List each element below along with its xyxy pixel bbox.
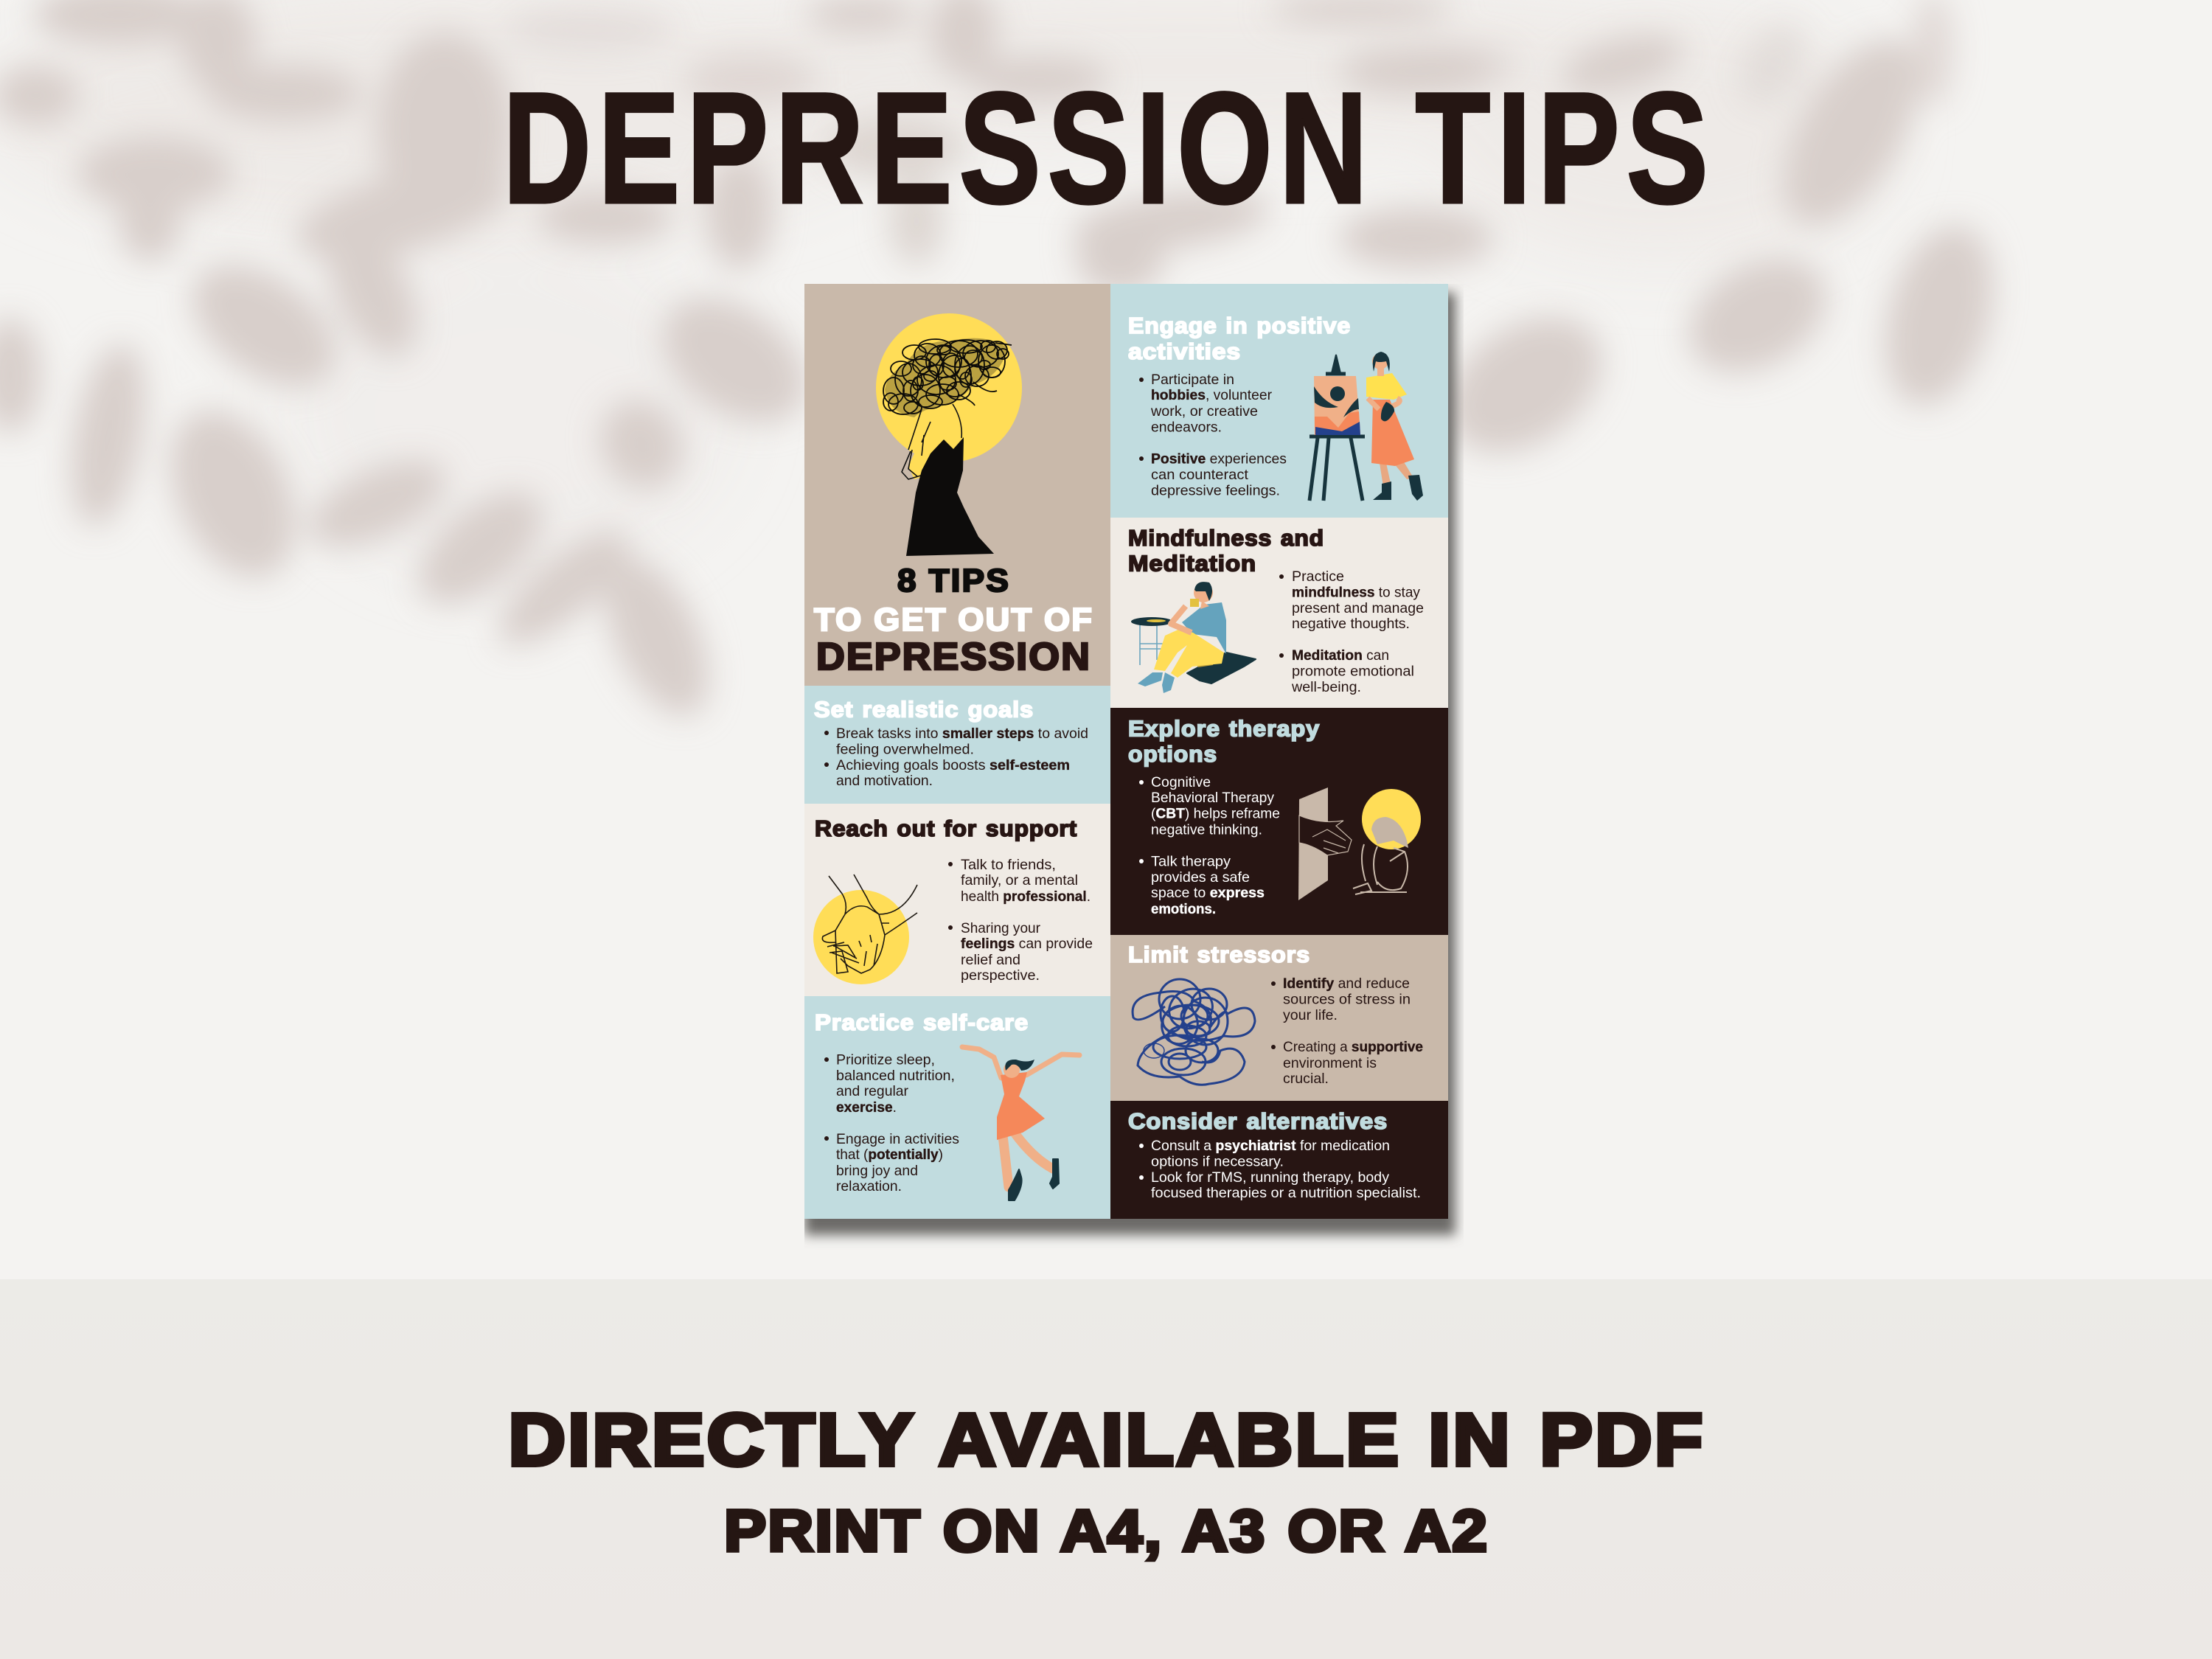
bullet list: negative thinking. <box>1151 821 1262 838</box>
panel: reach out for support <box>804 804 1110 996</box>
bullet list: perspective. <box>961 967 1040 984</box>
blurred leaf shadows <box>0 0 2011 731</box>
bullet list: relaxation. <box>836 1178 902 1194</box>
icon: painter at easel <box>1310 352 1423 501</box>
panel: set realistic goals <box>804 686 1110 804</box>
bullet list <box>1279 568 1424 695</box>
bullet list: (CBT) helps reframe <box>1151 805 1280 821</box>
bullet list <box>824 726 1088 789</box>
bullet list <box>948 857 1093 984</box>
bullet list: sources of stress in <box>1283 991 1411 1007</box>
hero heading: DEPRESSION <box>816 636 1091 678</box>
bullet list: Identify and reduce <box>1283 975 1410 992</box>
bullet list: Participate in <box>1151 372 1234 388</box>
panel: consider alternatives <box>1110 1101 1448 1219</box>
bullet list: endeavors. <box>1151 419 1222 435</box>
bullet list: health professional. <box>961 888 1091 905</box>
bullet list: feeling overwhelmed. <box>836 742 974 758</box>
soft haze behind leaf shadows <box>0 0 1880 575</box>
bullet list <box>1139 774 1280 917</box>
bullet list: Engage in activities <box>836 1131 959 1147</box>
bullet list: Achieving goals boosts self-esteem <box>836 757 1070 773</box>
panel: mindfulness and meditation <box>1110 518 1448 708</box>
bullet list: hobbies, volunteer <box>1151 387 1272 403</box>
footer subheadline: PRINT ON A4, A3 OR A2 <box>724 1498 1489 1563</box>
bullet list: feelings can provide <box>961 936 1093 952</box>
poster drop shadow <box>804 293 1455 1235</box>
hair curls <box>883 339 1012 414</box>
bullet list: Prioritize sleep, <box>836 1051 935 1068</box>
heading: Limit stressors <box>1128 942 1310 967</box>
bullet list: and motivation. <box>836 773 933 789</box>
heading: options <box>1128 741 1217 767</box>
bullet list: Practice <box>1292 568 1344 585</box>
bullet list: Talk therapy <box>1151 854 1231 870</box>
heading <box>1128 715 1320 767</box>
poster <box>804 284 1448 1219</box>
bullet list: environment is <box>1283 1055 1377 1071</box>
bullet list <box>824 1051 959 1194</box>
bullet list: relief and <box>961 952 1020 968</box>
bullet list: bring joy and <box>836 1163 918 1179</box>
heading <box>1128 525 1324 577</box>
bullet list <box>1271 975 1423 1087</box>
bullet list: space to express <box>1151 885 1265 901</box>
bullet list: Consult a psychiatrist for medication <box>1151 1138 1390 1154</box>
heading: Explore therapy <box>1128 715 1320 742</box>
hero heading <box>814 563 1093 678</box>
bullet list: work, or creative <box>1150 403 1258 420</box>
icon: tangled scribble <box>1133 979 1255 1085</box>
footer headline: DIRECTLY AVAILABLE IN PDF <box>509 1399 1705 1481</box>
bullet list: focused therapies or a nutrition specialist. <box>1151 1185 1421 1201</box>
bullet list: crucial. <box>1283 1071 1329 1087</box>
bullet list: mindfulness to stay <box>1292 584 1420 600</box>
bullet list: Positive experiences <box>1151 451 1287 467</box>
bullet list: exercise. <box>836 1099 897 1116</box>
bullet list: Cognitive <box>1151 774 1211 790</box>
bullet list: family, or a mental <box>961 872 1078 888</box>
bullet list: emotions. <box>1151 901 1216 917</box>
bullet list: well-being. <box>1291 679 1361 695</box>
bullet list: Meditation can <box>1292 647 1389 664</box>
main title: DEPRESSION TIPS <box>503 60 1715 236</box>
heading: Practice self-care <box>815 1009 1029 1035</box>
heading: Meditation <box>1128 550 1256 577</box>
bullet list: Creating a supportive <box>1283 1039 1423 1055</box>
bullet list: that (potentially) <box>836 1147 943 1163</box>
bullet list: balanced nutrition, <box>836 1068 955 1084</box>
bullet list: Break tasks into smaller steps to avoid <box>836 726 1088 742</box>
bullet list: depressive feelings. <box>1151 482 1280 498</box>
icon: hand reaching through door to seated person <box>1298 787 1421 900</box>
panel: explore therapy options <box>1110 708 1448 935</box>
icon: woman with curly hair on yellow circle <box>876 313 1022 556</box>
bullet list: present and manage <box>1292 600 1424 616</box>
panel: limit stressors <box>1110 935 1448 1101</box>
bottom band <box>0 1279 2212 1659</box>
heading: Reach out for support <box>815 815 1077 841</box>
heading: Mindfulness and <box>1128 525 1324 551</box>
hero heading: TO GET OUT OF <box>814 602 1093 638</box>
bullet list: can counteract <box>1151 467 1249 483</box>
icon: holding hands <box>813 874 917 984</box>
bullet list <box>1139 372 1287 498</box>
bullet list: provides a safe <box>1151 869 1250 886</box>
bullet list: and regular <box>836 1083 908 1099</box>
panel: hero <box>804 284 1110 686</box>
heading: Set realistic goals <box>814 696 1034 723</box>
heading <box>1128 313 1351 364</box>
bullet list: Talk to friends, <box>961 857 1056 873</box>
bullet list: options if necessary. <box>1151 1153 1284 1169</box>
heading: Engage in positive <box>1128 313 1351 338</box>
bullet list: negative thoughts. <box>1292 616 1410 632</box>
bullet list: Behavioral Therapy <box>1151 790 1274 806</box>
bullet list: Look for rTMS, running therapy, body <box>1151 1169 1389 1186</box>
bullet list: Sharing your <box>961 920 1040 936</box>
heading: activities <box>1128 338 1241 364</box>
bullet list: promote emotional <box>1292 664 1414 680</box>
bullet list <box>1139 1138 1421 1201</box>
icon: dancing woman <box>962 1047 1079 1200</box>
icon: man with cup <box>1131 582 1256 693</box>
heading: Consider alternatives <box>1128 1108 1388 1134</box>
panel: practice self-care <box>804 996 1110 1219</box>
hero heading: 8 TIPS <box>897 563 1010 599</box>
bullet list: your life. <box>1283 1007 1338 1023</box>
panel: engage in positive activities <box>1110 284 1448 518</box>
